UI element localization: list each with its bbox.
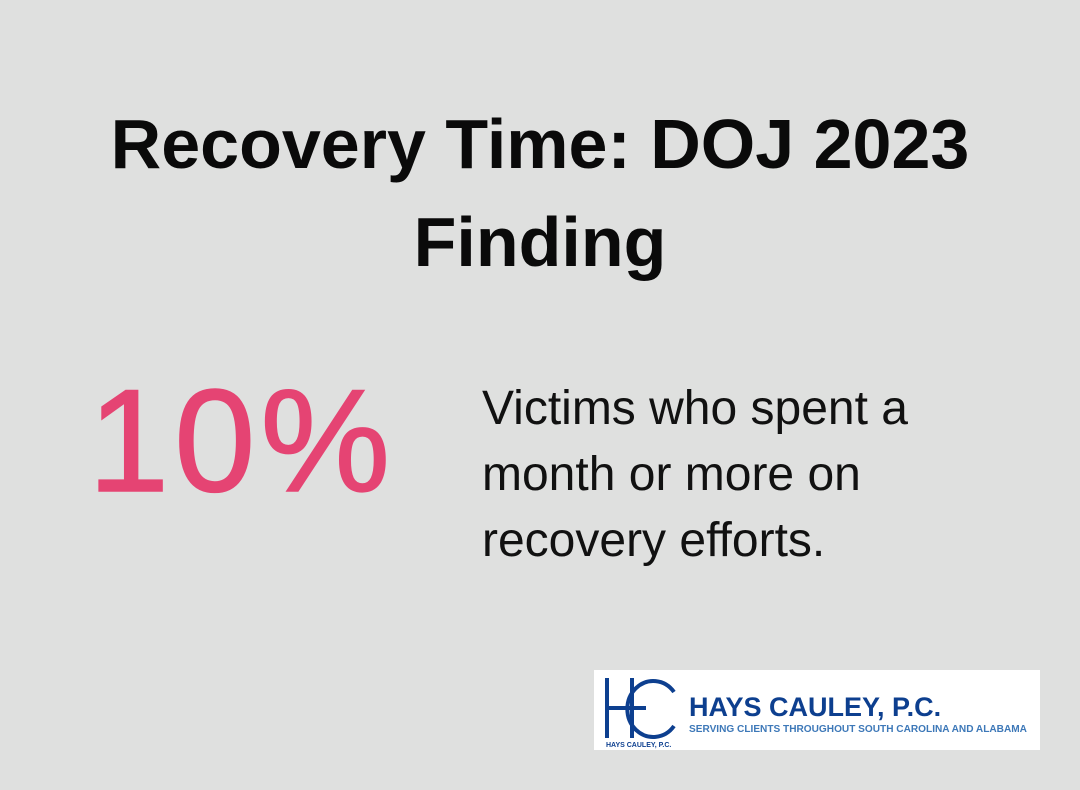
description text [482, 382, 908, 567]
logo: SERVING CLIENTS THROUGHOUT SOUTH CAROLINA AND ALABAMA [689, 724, 1028, 735]
description text: Victims who spent a [482, 382, 908, 435]
description text: recovery efforts. [482, 514, 825, 567]
title [111, 105, 969, 281]
title: Recovery Time: DOJ 2023 [111, 105, 969, 183]
title: Finding [414, 203, 666, 281]
description text: month or more on [482, 448, 861, 501]
icon: HC monogram [607, 678, 674, 738]
logo [594, 670, 1040, 750]
big stat: 10% [88, 359, 395, 522]
logo: HAYS CAULEY, P.C. [689, 692, 941, 722]
logo: HAYS CAULEY, P.C. [606, 742, 671, 749]
